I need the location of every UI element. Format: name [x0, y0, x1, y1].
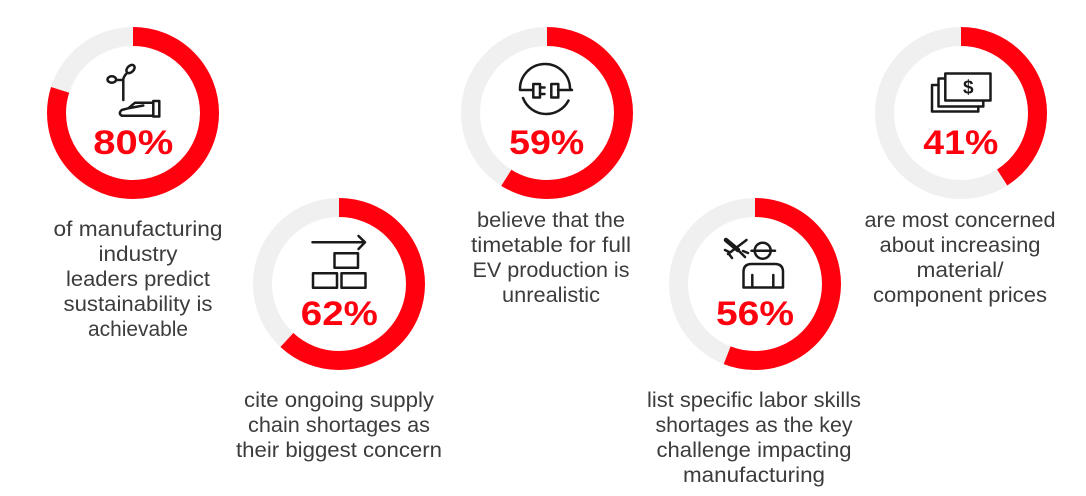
icon: arrow and boxes — [312, 236, 366, 288]
icon: dollar sign: $ — [963, 78, 974, 98]
caption: 59%: believe that the — [477, 209, 625, 232]
caption: 62%: cite ongoing supply — [244, 389, 435, 412]
percentage: 56%: 56% — [716, 295, 794, 333]
caption: 56%: list specific labor skills — [647, 389, 861, 412]
caption: 59%: unrealistic — [502, 284, 600, 307]
caption: 56%: manufacturing — [683, 464, 825, 487]
caption: 41%: material/ — [916, 259, 1004, 282]
panel: 56% labor skills — [647, 208, 861, 487]
caption: 80%: of manufacturing — [54, 218, 222, 241]
caption: 80%: leaders predict — [66, 268, 210, 291]
percentage: 41%: 41% — [923, 124, 998, 162]
panel: 41% material prices — [864, 36, 1056, 307]
caption: 62%: chain shortages as — [248, 414, 430, 437]
caption: 59%: EV production is — [472, 259, 630, 282]
panel: 59% EV timetable — [470, 36, 631, 307]
icon: stack of banknotes — [932, 74, 990, 112]
icon: plant in hand — [108, 63, 159, 116]
caption: 80%: industry — [98, 243, 178, 266]
caption: 59%: timetable for full — [471, 234, 631, 257]
percentage: 80%: 80% — [93, 124, 173, 162]
panel: 80% sustainability — [54, 36, 222, 341]
donut chart: 62% — [262, 208, 416, 360]
percentage: 59%: 59% — [509, 124, 584, 162]
icon: plug connector — [520, 64, 572, 114]
donut chart: 59% — [470, 36, 624, 190]
percentage: 62%: 62% — [301, 295, 378, 333]
caption: 41%: about increasing — [880, 234, 1040, 257]
caption: 41%: are most concerned — [864, 209, 1056, 232]
caption: 62%: their biggest concern — [236, 439, 442, 462]
icon: worker with tools — [725, 240, 783, 288]
donut chart: 41% — [884, 36, 1038, 190]
caption: 80%: achievable — [88, 318, 188, 341]
panel: 62% supply chain — [236, 208, 442, 462]
donut chart: 80% — [56, 36, 210, 190]
caption: 56%: shortages as the key — [656, 414, 853, 437]
caption: 56%: challenge impacting — [656, 439, 852, 462]
donut chart: 56% — [678, 208, 832, 360]
caption: 80%: sustainability is — [64, 293, 212, 316]
caption: 41%: component prices — [873, 284, 1047, 307]
